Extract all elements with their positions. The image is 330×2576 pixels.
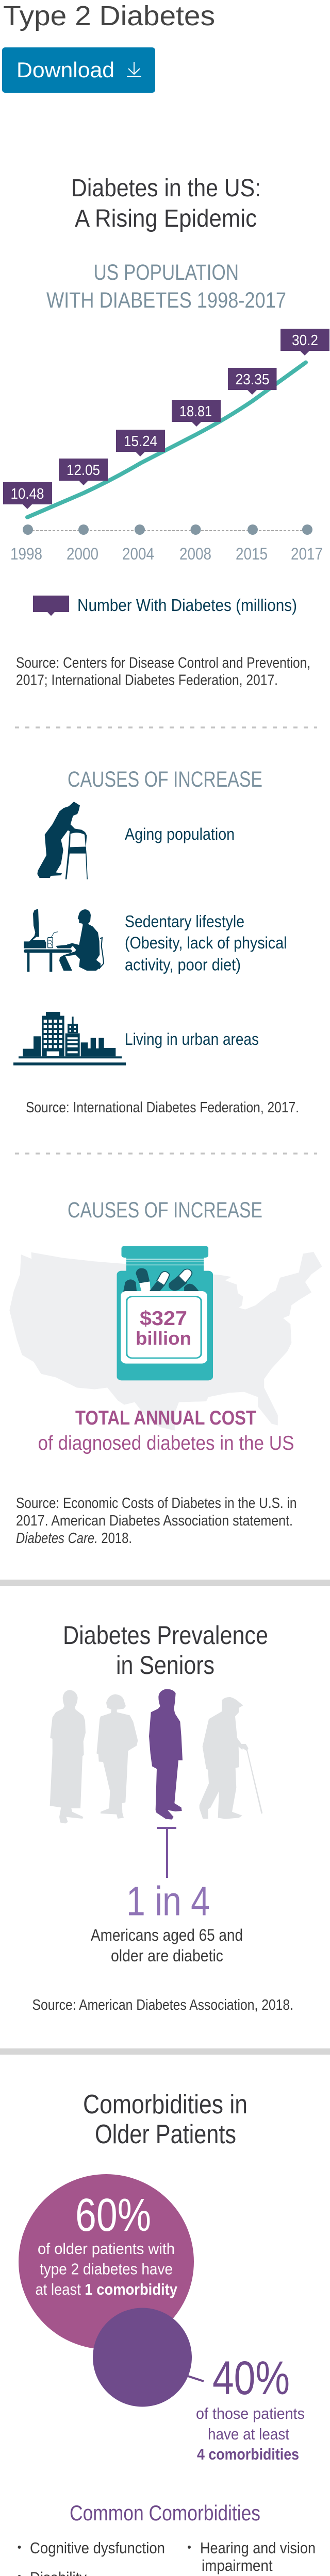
text: living in urban areas: Living in urban areas — [125, 1030, 259, 1048]
text: sedentary lifestyle: activity, poor diet) — [125, 955, 241, 974]
chart subtitle: US POPULATION — [94, 260, 239, 285]
value tag 2015 — [228, 368, 276, 395]
pointer — [157, 1828, 176, 1878]
heading: in Seniors — [116, 1651, 214, 1680]
circle: 40 percent — [93, 2308, 305, 2463]
circle: 60 percent — [19, 2174, 194, 2349]
value tag 1998: 10.48 — [10, 486, 44, 502]
download button: Download — [16, 58, 114, 82]
silhouette: senior 3 highlighted — [149, 1689, 183, 1820]
value tag 2008: 18.81 — [179, 403, 212, 420]
value tag 2017: 30.2 — [292, 332, 318, 349]
chart subtitle — [46, 260, 286, 313]
icon: person at desk — [24, 909, 104, 972]
value tag 2015: 23.35 — [235, 371, 269, 388]
heading: Older Patients — [95, 2120, 236, 2149]
silhouette: senior 4 with cane — [200, 1697, 262, 1819]
text: sedentary lifestyle — [125, 912, 287, 974]
heading — [83, 2090, 248, 2149]
panel: causes of increase — [13, 767, 299, 1116]
circle: 40 percent: have at least — [208, 2425, 289, 2443]
text: stat description — [91, 1926, 243, 1965]
list: right column: impairment — [202, 2556, 273, 2574]
pills — [123, 1268, 199, 1292]
icon: download arrow — [127, 62, 141, 76]
panel: annual cost — [9, 1198, 322, 1547]
chart subtitle: WITH DIABETES 1998-2017 — [46, 288, 286, 313]
text: total annual cost: TOTAL ANNUAL COST — [75, 1407, 256, 1429]
circle: 60 percent: at least 1 comorbidity — [35, 2280, 178, 2298]
value tag 2017 — [280, 329, 329, 355]
heading: A Rising Epidemic — [75, 205, 257, 232]
source: 2017; International Diabetes Federation, 2017. — [16, 672, 278, 688]
callout: $327 billion: billion — [136, 1328, 191, 1349]
icon: pill bottle — [117, 1246, 213, 1380]
source: Source: American Diabetes Association, 2018. — [32, 1997, 293, 2013]
heading — [71, 175, 261, 232]
text: sedentary lifestyle: (Obesity, lack of physical — [125, 934, 287, 952]
title: Type 2 Diabetes — [3, 1, 215, 31]
value tag 2008 — [172, 400, 221, 427]
text: stat description: Americans aged 65 and — [91, 1926, 243, 1944]
list: left column: Cognitive dysfunction — [30, 2539, 165, 2557]
year labels: 2017 — [291, 545, 323, 563]
source — [16, 1495, 297, 1547]
circle: 40 percent: 40% — [212, 2352, 290, 2404]
circle: 40 percent: of those patients — [196, 2404, 305, 2422]
source: Diabetes Care. 2018. — [16, 1530, 132, 1547]
heading: CAUSES OF INCREASE — [68, 1198, 262, 1223]
icon: city — [13, 1012, 126, 1065]
circle: 60 percent: 60% — [75, 2190, 151, 2241]
text: aging population: Aging population — [125, 825, 235, 843]
year labels: 2004 — [122, 545, 154, 563]
list: right column — [188, 2539, 317, 2576]
year labels: 1998 — [10, 545, 42, 563]
list: right column: Hearing and vision — [200, 2539, 316, 2557]
heading — [63, 1621, 268, 1680]
text: total annual cost — [38, 1407, 294, 1454]
year labels: 2008 — [179, 545, 211, 563]
callout: $327 billion: $327 — [140, 1308, 187, 1330]
year labels: 2015 — [236, 545, 268, 563]
value tag 2000: 12.05 — [67, 462, 100, 479]
list: left column — [18, 2539, 165, 2576]
year labels: 2000 — [67, 545, 98, 563]
stat: 1 in 4: 1 in 4 — [126, 1878, 210, 1924]
heading: Comorbidities in — [83, 2090, 248, 2120]
icon: older person with walker — [37, 802, 88, 879]
heading: Diabetes in the US: — [71, 175, 261, 202]
legend: Number With Diabetes (millions) — [77, 596, 297, 615]
panel: comorbidities — [16, 2090, 317, 2576]
circle: 60 percent: type 2 diabetes have — [40, 2260, 173, 2278]
panel: prevalence in seniors — [32, 1621, 293, 2013]
source — [16, 655, 310, 688]
value tag 2000 — [59, 459, 108, 485]
silhouette: senior 2 — [96, 1694, 138, 1819]
value tag 2004 — [116, 430, 165, 456]
heading: Diabetes Prevalence — [63, 1621, 268, 1650]
value tag 1998 — [3, 482, 52, 509]
silhouette: senior 1 — [50, 1690, 86, 1823]
text: stat description: older are diabetic — [111, 1946, 223, 1965]
source: 2017. American Diabetes Association statement. — [16, 1513, 293, 1529]
text: total annual cost: of diagnosed diabetes in the US — [38, 1432, 294, 1454]
circle: 60 percent: of older patients with — [38, 2240, 175, 2258]
download button — [2, 47, 155, 93]
text: sedentary lifestyle: Sedentary lifestyle — [125, 912, 244, 930]
callout: $327 billion — [136, 1308, 191, 1349]
circle: 40 percent: 4 comorbidities — [197, 2445, 299, 2463]
line chart — [3, 329, 329, 563]
heading: CAUSES OF INCREASE — [68, 767, 262, 792]
panel: diabetes in the US — [3, 175, 329, 688]
value tag 2004: 15.24 — [124, 433, 157, 450]
map of the US — [9, 1252, 322, 1431]
subheading: Common Comorbidities — [70, 2501, 260, 2525]
year labels — [10, 545, 323, 563]
